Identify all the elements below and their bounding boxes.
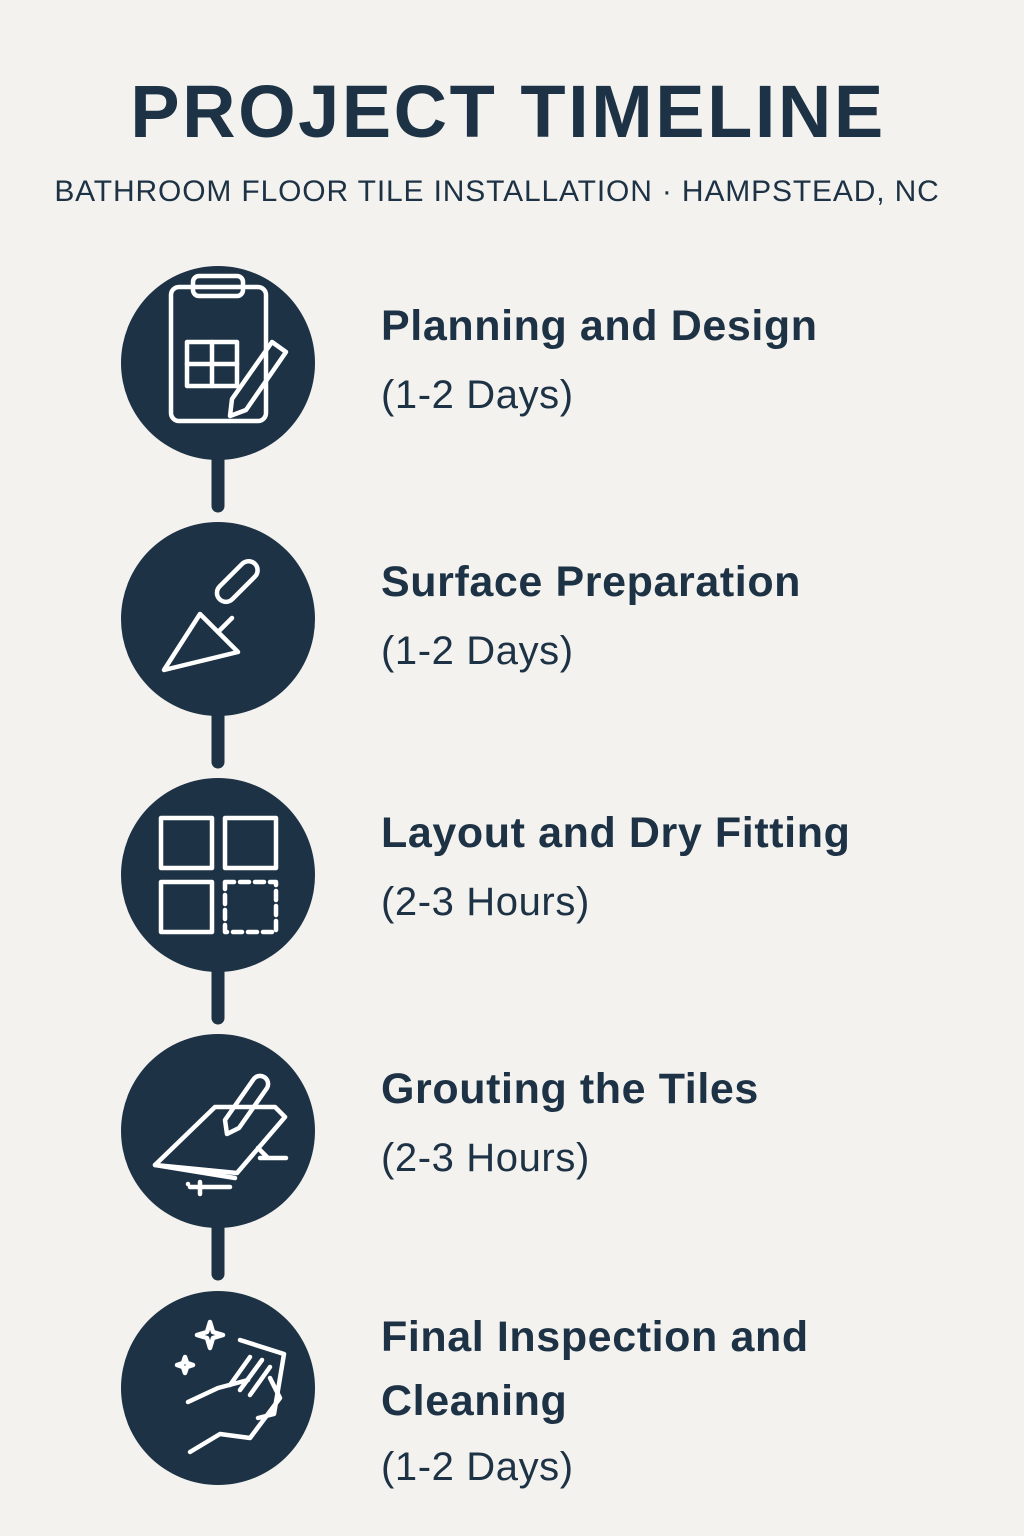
step 1: [381, 302, 818, 417]
icon: trowel: [164, 557, 261, 670]
step 2: [381, 558, 801, 673]
step 4: [381, 1065, 759, 1180]
text: Surface Preparation: [381, 558, 801, 606]
text: Cleaning: [381, 1377, 567, 1425]
subtitle: BATHROOM FLOOR TILE INSTALLATION · HAMPSTEAD, NC: [54, 175, 940, 208]
text: (1-2 Days): [381, 1445, 574, 1489]
icon: grouting: [155, 1076, 286, 1194]
text: Grouting the Tiles: [381, 1065, 759, 1113]
icon: hand cleaning: [177, 1322, 284, 1452]
title: PROJECT TIMELINE: [130, 70, 886, 153]
text: Final Inspection and: [381, 1313, 809, 1361]
text: Planning and Design: [381, 302, 818, 350]
text: (2-3 Hours): [381, 880, 590, 924]
icon: clipboard: [171, 276, 286, 421]
step 5: [381, 1313, 809, 1489]
text: (1-2 Days): [381, 373, 574, 417]
text: (2-3 Hours): [381, 1136, 590, 1180]
text: Layout and Dry Fitting: [381, 809, 850, 857]
text: (1-2 Days): [381, 629, 574, 673]
step 3: [381, 809, 850, 924]
icon: tiles: [161, 818, 276, 932]
